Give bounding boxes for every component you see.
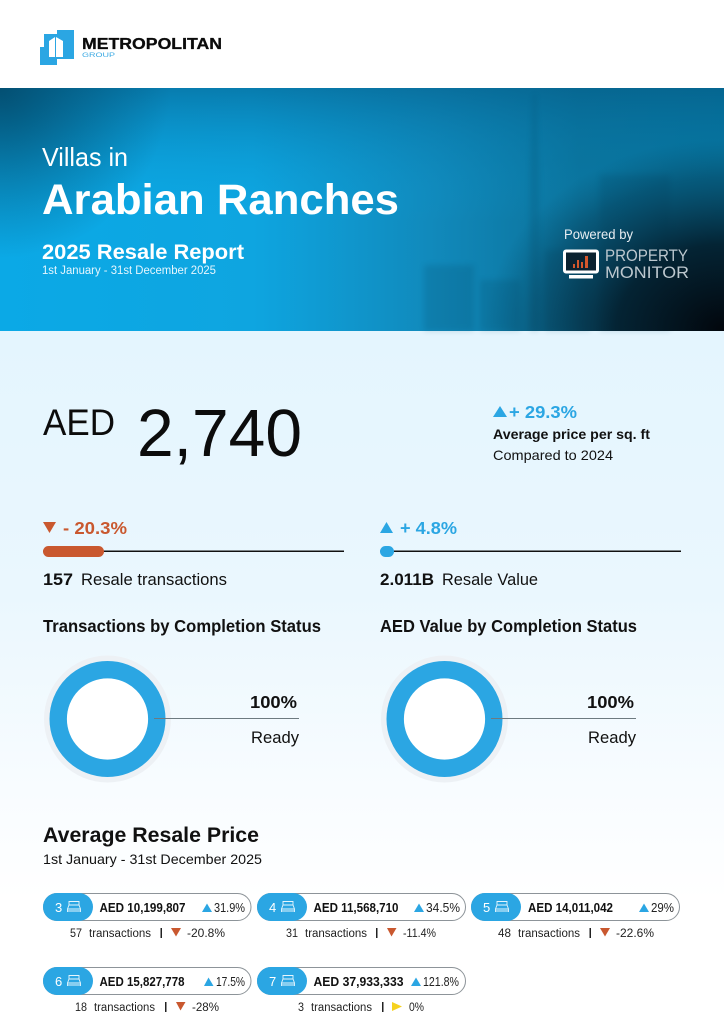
donut label: Ready — [251, 728, 299, 747]
card: 4 bedrooms: transactions — [305, 928, 367, 940]
card: 6 bedrooms: transactions — [94, 1002, 155, 1014]
card: 6 bedrooms: 17.5% — [216, 975, 245, 989]
card: 6 bedrooms: 6 — [55, 974, 62, 989]
icon: bed — [282, 976, 294, 986]
price value: 2,740 — [137, 396, 302, 471]
card: 3 bedrooms: 31.9% — [214, 901, 245, 915]
card: 3 bedrooms — [43, 893, 251, 940]
icon: Property Monitor monitor — [564, 251, 598, 278]
card: 3 bedrooms: transactions — [89, 928, 151, 940]
powered by: Powered by — [564, 227, 633, 242]
price change: + 29.3% — [509, 402, 577, 422]
card: 3 bedrooms: AED 10,199,807 — [100, 901, 186, 915]
card: 3 bedrooms: 3 — [55, 900, 62, 915]
donut value: 100% — [250, 692, 297, 712]
stat: resale transactions — [43, 518, 344, 589]
card: 6 bedrooms: -28% — [192, 1002, 219, 1014]
transactions label: Resale transactions — [81, 571, 227, 589]
card: 5 bedrooms: 48 — [498, 928, 511, 940]
card: 7 bedrooms — [257, 967, 466, 1014]
heading: AED value by completion status: AED Value by Completion Status — [380, 616, 637, 636]
donut chart: transactions — [44, 656, 299, 782]
card: 7 bedrooms: 7 — [269, 974, 276, 989]
stat: resale value — [380, 518, 681, 589]
icon: down arrow — [43, 522, 56, 533]
comparison note: Compared to 2024 — [493, 447, 613, 463]
banner subtitle: 2025 Resale Report — [42, 241, 244, 264]
card: 5 bedrooms: -22.6% — [616, 928, 654, 940]
card: 6 bedrooms — [43, 967, 251, 1014]
card: 5 bedrooms: transactions — [518, 928, 580, 940]
icon: bed — [496, 902, 508, 912]
card: 4 bedrooms: 4 — [269, 900, 276, 915]
card: 7 bedrooms: AED 37,933,333 — [314, 975, 404, 989]
progress bar — [380, 546, 681, 557]
card: 5 bedrooms: 29% — [651, 901, 674, 915]
date range: 1st January - 31st December 2025 — [43, 851, 262, 867]
card: 7 bedrooms: 3 — [298, 1002, 304, 1014]
transactions value: 157 — [43, 571, 73, 589]
panel: hero banner — [0, 88, 724, 331]
heading: average resale price: Average Resale Price — [43, 823, 259, 847]
Property Monitor wordmark: MONITOR — [605, 263, 689, 282]
logo: Metropolitan Group — [40, 30, 222, 65]
icon: logo mark — [40, 30, 74, 65]
stat: average price per sq ft — [43, 396, 650, 471]
icon: up arrow — [380, 522, 393, 533]
donut chart: AED value — [381, 656, 636, 782]
value figure: 2.011B — [380, 571, 434, 589]
page background — [0, 331, 724, 1024]
card: 7 bedrooms: transactions — [311, 1002, 372, 1014]
heading: transactions by completion status: Transactions by Completion Status — [43, 616, 321, 636]
progress bar — [43, 546, 344, 557]
Property Monitor wordmark: PROPERTY — [605, 246, 688, 265]
card: 7 bedrooms: 121.8% — [423, 975, 459, 989]
donut label: Ready — [588, 728, 636, 747]
value change: + 4.8% — [400, 518, 457, 538]
skyline — [424, 95, 670, 331]
Property Monitor wordmark — [605, 246, 689, 282]
card: 5 bedrooms: AED 14,011,042 — [528, 901, 613, 915]
donut value: 100% — [587, 692, 634, 712]
icon: up arrow — [493, 406, 507, 417]
card: 4 bedrooms: 31 — [286, 928, 298, 940]
logo wordmark: METROPOLITAN — [82, 36, 222, 53]
card: 5 bedrooms — [471, 893, 680, 940]
banner dates: 1st January - 31st December 2025 — [42, 265, 216, 277]
card: 5 bedrooms: 5 — [483, 900, 490, 915]
banner kicker: Villas in — [42, 142, 128, 172]
logo subtext: GROUP — [82, 52, 115, 59]
transactions change: - 20.3% — [63, 518, 127, 538]
card: 4 bedrooms: AED 11,568,710 — [314, 901, 399, 915]
banner title: Arabian Ranches — [42, 176, 399, 224]
card: 3 bedrooms: -20.8% — [187, 928, 225, 940]
card: 4 bedrooms: 34.5% — [426, 901, 460, 915]
card: 4 bedrooms: -11.4% — [403, 928, 436, 940]
value label: Resale Value — [442, 571, 538, 589]
icon: bed — [68, 976, 80, 986]
price label: Average price per sq. ft — [493, 426, 650, 442]
card: 3 bedrooms: 57 — [70, 928, 82, 940]
card: 4 bedrooms — [257, 893, 466, 940]
card: 6 bedrooms: AED 15,827,778 — [100, 975, 185, 989]
AED label: AED — [43, 402, 115, 443]
icon: bed — [282, 902, 294, 912]
card: 6 bedrooms: 18 — [75, 1002, 87, 1014]
icon: bed — [68, 902, 80, 912]
card: 7 bedrooms: 0% — [409, 1002, 424, 1014]
